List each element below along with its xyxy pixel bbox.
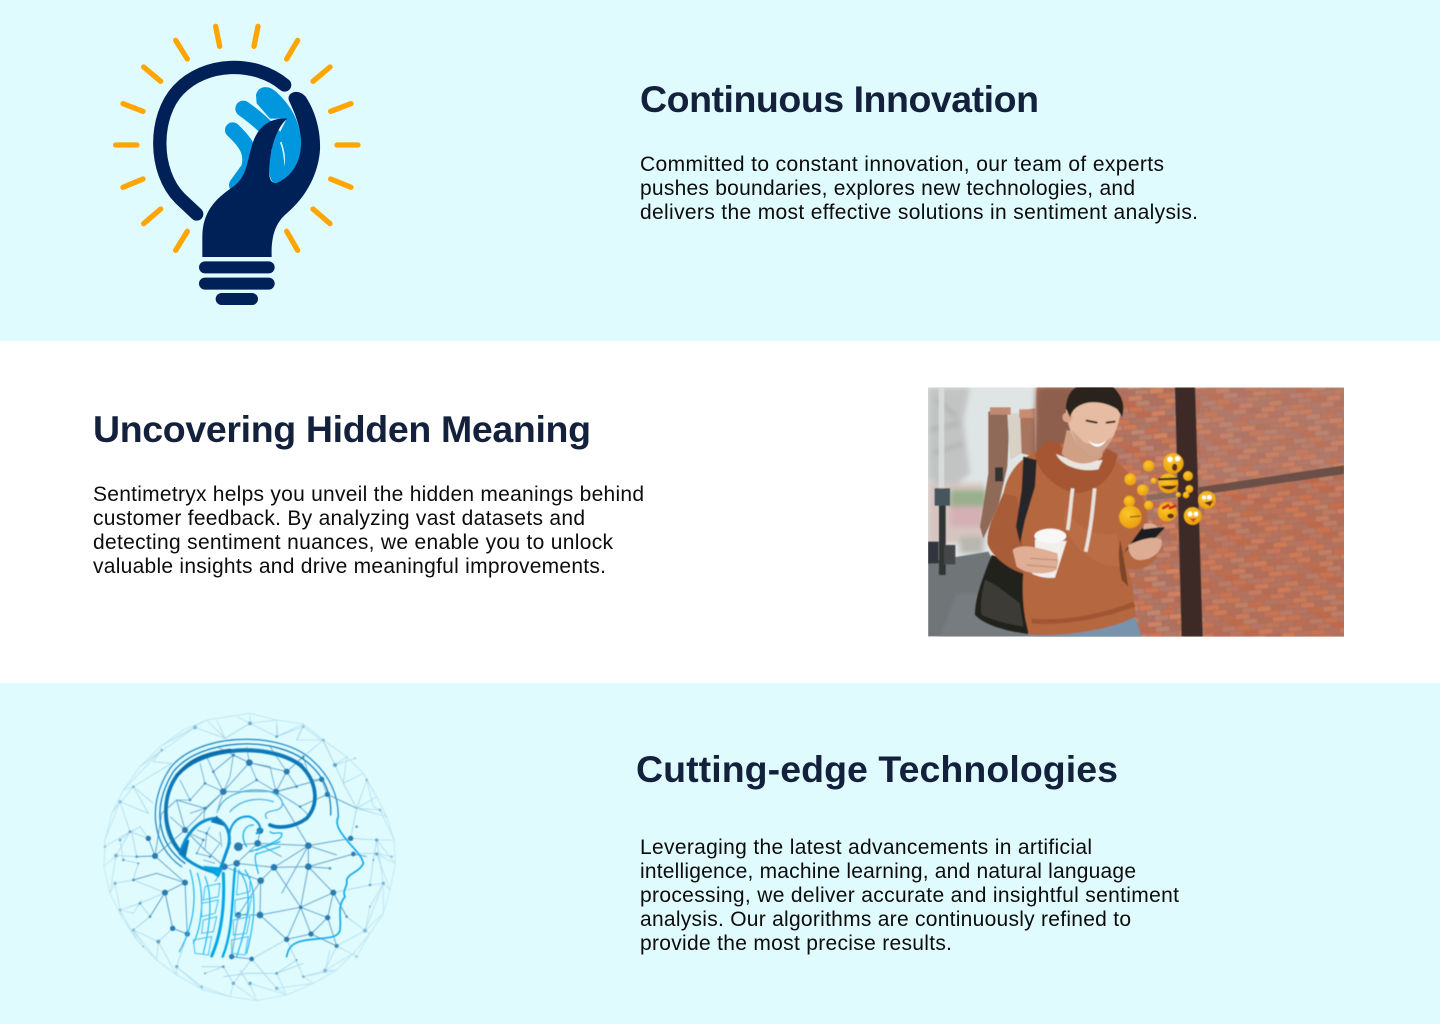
text block: uncovering hidden meaning: detecting sentiment nuances, we enable you to unlock [93,531,614,554]
text block: uncovering hidden meaning: valuable insights and drive meaningful improvements. [93,555,606,578]
text block: uncovering hidden meaning: customer feedback. By analyzing vast datasets and [93,507,585,530]
text block: cutting-edge technologies [640,836,1179,955]
bulb outline [160,67,285,214]
cerebellum and brain stem [180,818,229,873]
illustration: brain in network sphere [104,713,395,1001]
dendrites inside brain [170,747,322,830]
brick wall [1037,387,1347,641]
light rays [116,26,358,250]
street pole [928,387,955,575]
heading: continuous innovation: Continuous Innovation [640,78,1039,120]
text block: uncovering hidden meaning [93,483,644,578]
blue fingers [233,87,301,185]
network nodes [104,721,393,990]
drainpipe and ledge [1147,387,1344,637]
strap [1016,457,1037,543]
phone hand [1128,538,1162,560]
pavement [928,552,1033,637]
face profile [287,817,363,957]
icon: lightbulb with hand [116,26,358,305]
hoodie [988,443,1157,635]
brain cortex [166,750,315,852]
text block: uncovering hidden meaning: Sentimetryx helps you unveil the hidden meanings behind [93,483,644,506]
eyes and smile [1087,421,1115,423]
cup [1032,539,1067,578]
heading: uncovering hidden meaning: Uncovering Hidden Meaning [93,408,591,450]
heading: cutting-edge technologies: Cutting-edge Technologies [636,748,1118,790]
jeans [1028,615,1142,638]
brain and head outline [155,739,363,957]
text block: continuous innovation: delivers the most effective solutions in sentiment analysis. [640,201,1198,224]
network sphere [104,713,395,1001]
skull layers [155,739,338,867]
emojis [1119,453,1216,528]
text block: cutting-edge technologies: Leveraging the latest advancements in artificial [640,836,1092,859]
distant building [980,407,1035,538]
inner folds [218,790,282,818]
photo: man with phone and emojis [928,386,1347,641]
bulb base [199,261,275,305]
hand holding cup [1013,546,1058,573]
hood [1035,441,1117,493]
sphere outer mesh [104,713,395,1001]
text block: cutting-edge technologies: provide the most precise results. [640,932,952,955]
spine [212,873,224,956]
photo background: street and sky [928,387,1041,561]
panel: continuous innovation band [0,0,1440,341]
text block: cutting-edge technologies: intelligence, machine learning, and natural language [640,860,1136,883]
phone [1123,527,1165,553]
hair [1066,386,1123,417]
inner network lines [133,747,367,959]
bag [975,555,1028,634]
neck and head [1062,430,1107,463]
text block: continuous innovation [640,153,1198,224]
hand [202,92,320,257]
text block: continuous innovation: pushes boundaries, explores new technologies, and [640,177,1135,200]
drawstrings [1068,488,1095,552]
text block: cutting-edge technologies: analysis. Our algorithms are continuously refined to [640,908,1131,931]
man [975,386,1165,638]
text block: continuous innovation: Committed to constant innovation, our team of experts [640,153,1164,176]
text block: cutting-edge technologies: processing, we deliver accurate and insightful sentiment [640,884,1179,907]
panel: cutting-edge technologies band [0,683,1440,1024]
